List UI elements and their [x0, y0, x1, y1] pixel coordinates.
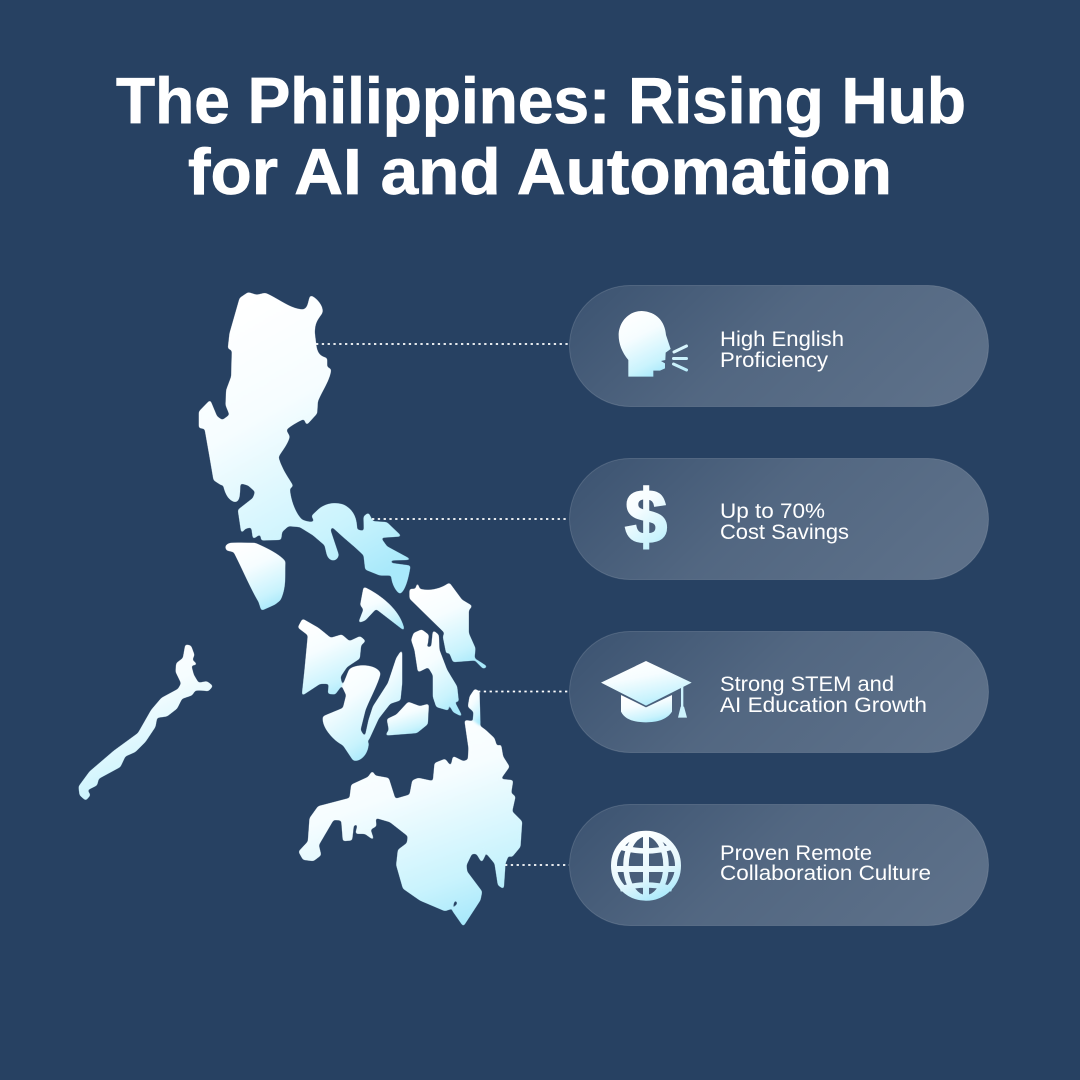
island: Mindanao — [299, 721, 522, 926]
label: Collaboration Culture — [720, 862, 931, 885]
island: Panay — [298, 619, 365, 695]
island: Cebu — [365, 651, 402, 740]
panel: High English Proficiency — [570, 286, 988, 406]
island: Dinagat — [468, 689, 480, 725]
title: for AI and Automation — [188, 135, 892, 208]
icon: dollar sign: $ — [625, 475, 667, 560]
island: Bohol — [386, 702, 428, 735]
island: Leyte — [412, 630, 462, 716]
map of the Philippines — [79, 293, 522, 926]
panel: Up to 70% Cost Savings — [570, 458, 988, 580]
island: Luzon — [199, 293, 410, 593]
panel: Proven Remote Collaboration Culture — [570, 804, 988, 926]
label — [720, 673, 927, 717]
title — [116, 64, 966, 208]
icon: graduation cap — [601, 661, 692, 722]
label — [720, 842, 931, 885]
label — [720, 500, 849, 544]
icon: globe — [613, 833, 679, 898]
label: AI Education Growth — [720, 694, 927, 717]
label: Proven Remote — [720, 842, 872, 865]
icon: speaking head — [619, 311, 686, 377]
island: Mindoro — [226, 543, 285, 610]
island: Samar — [410, 583, 487, 668]
label: Strong STEM and — [720, 673, 894, 696]
island: Negros — [323, 666, 380, 760]
label — [720, 328, 844, 372]
panel: Strong STEM and AI Education Growth — [570, 632, 988, 752]
label: Cost Savings — [720, 521, 849, 544]
label: High English — [720, 328, 844, 351]
island: Palawan — [79, 645, 212, 800]
label: Proficiency — [720, 349, 829, 372]
island: Masbate — [359, 587, 404, 630]
connector lines — [316, 344, 569, 865]
title: The Philippines: Rising Hub — [116, 64, 966, 137]
label: Up to 70% — [720, 500, 825, 523]
